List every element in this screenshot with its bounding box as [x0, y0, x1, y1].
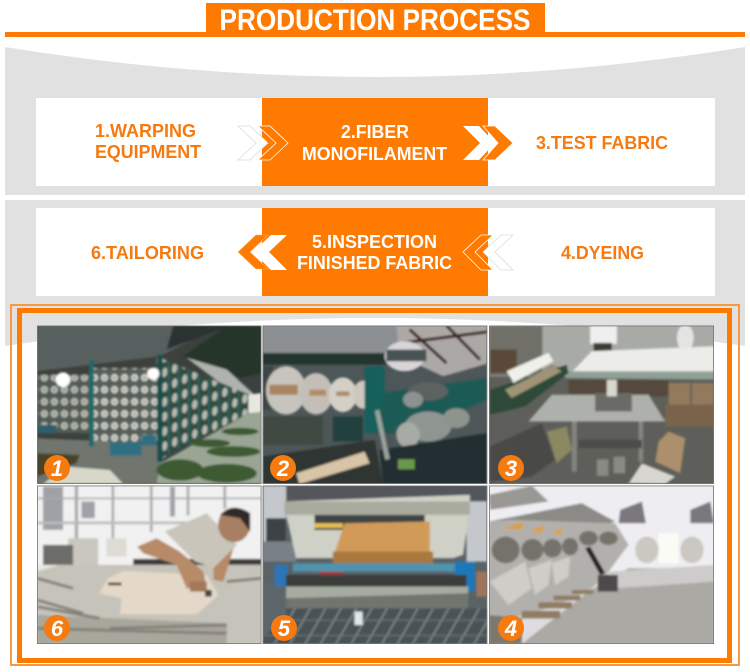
number badge 4: 4: [504, 616, 517, 641]
step 6 label: 6.TAILORING: [91, 243, 204, 263]
step 1 label: 1.WARPING: [95, 121, 196, 141]
arrow: step 5 to 6: [238, 235, 287, 270]
photo 6: tailoring: [33, 481, 267, 648]
step 1 label: EQUIPMENT: [95, 142, 201, 162]
number badge 5: [271, 615, 297, 641]
step 2 label: [302, 122, 447, 164]
arrow: step 4 to 5: [463, 235, 513, 270]
arrow: step 1 to 2: [238, 126, 288, 160]
photo 1: warping equipment: [33, 323, 267, 487]
step 2 label: 2.FIBER: [341, 122, 409, 142]
number badge 1: [44, 455, 70, 481]
number badge 3: [498, 455, 524, 481]
step 2 label: MONOFILAMENT: [302, 144, 447, 164]
number badge 2: [270, 455, 296, 481]
arrow: step 2 to 3: [463, 126, 513, 160]
number badge 6: 6: [51, 616, 64, 641]
panel: process row 1: [36, 98, 715, 186]
number badge 1: 1: [51, 456, 63, 481]
step 1 label: [95, 121, 201, 162]
photo 5: inspection: [259, 481, 493, 648]
step 4 label: 4.DYEING: [561, 243, 644, 263]
panel: lower gray background: [5, 200, 745, 346]
photo 4: dyeing: [485, 481, 719, 648]
number badge 5: 5: [278, 616, 291, 641]
number badge 6: [44, 615, 70, 641]
photo 3: test fabric: [485, 323, 719, 487]
step 5 label: FINISHED FABRIC: [297, 253, 452, 273]
photo frame: [11, 305, 739, 665]
step 5 label: 5.INSPECTION: [312, 232, 437, 252]
panel: process row 2: [36, 208, 715, 296]
number badge 4: [498, 615, 524, 641]
number badge 2: 2: [276, 456, 290, 481]
title banner: [5, 3, 745, 37]
title banner: PRODUCTION PROCESS: [220, 4, 530, 37]
photo 2: fiber monofilament: [259, 323, 493, 487]
panel: top gray curved background: [5, 47, 745, 195]
step 5 label: [297, 232, 452, 273]
number badge 3: 3: [505, 456, 517, 481]
step 3 label: 3.TEST FABRIC: [536, 133, 668, 153]
